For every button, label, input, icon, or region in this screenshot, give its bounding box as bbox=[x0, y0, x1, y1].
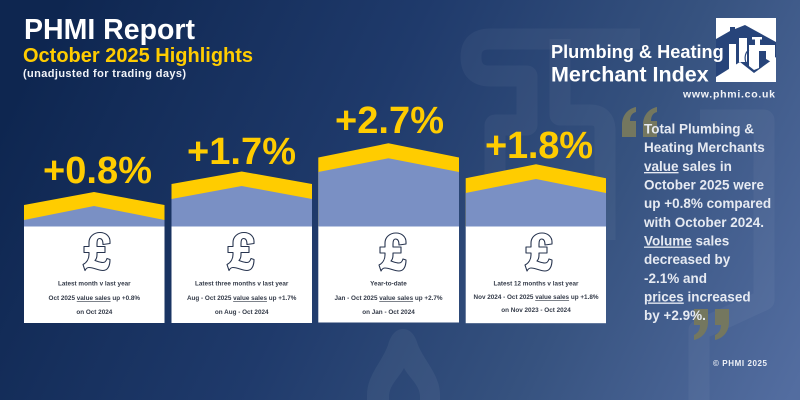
logo icon: house with tap bbox=[716, 18, 776, 82]
card text: Aug - Oct 2025 value sales up +1.7% bbox=[187, 295, 297, 302]
roof: yellow bbox=[172, 172, 312, 227]
roof: blue bbox=[318, 158, 459, 227]
roof: blue bbox=[24, 206, 164, 227]
percentage: +2.7% bbox=[335, 100, 444, 142]
card text: Jan - Oct 2025 value sales up +2.7% bbox=[334, 295, 443, 302]
summary text block: prices increased bbox=[644, 290, 751, 304]
card text bbox=[187, 281, 297, 316]
card body bbox=[24, 226, 164, 323]
panel: latest month bbox=[24, 150, 164, 323]
roof: blue bbox=[172, 186, 312, 227]
roof: blue bbox=[466, 179, 606, 227]
icon: closing quote marks bbox=[694, 309, 729, 340]
summary text block: with October 2024. bbox=[643, 215, 764, 230]
icon: pound bbox=[83, 232, 110, 270]
summary text block: Total Plumbing & bbox=[644, 122, 754, 136]
card text: Oct 2025 value sales up +0.8% bbox=[49, 295, 140, 302]
watermark flame bbox=[367, 329, 440, 400]
percentage: +1.8% bbox=[485, 125, 593, 167]
background watermark: pipes and flame bbox=[367, 39, 764, 400]
roof: yellow bbox=[24, 192, 164, 227]
summary text block: -2.1% and bbox=[644, 271, 707, 286]
summary text block: by +2.9%. bbox=[644, 308, 706, 323]
card body bbox=[318, 226, 459, 322]
card text: on Jan - Oct 2024 bbox=[362, 309, 415, 316]
card text bbox=[334, 281, 443, 316]
icon: pound bbox=[525, 233, 552, 271]
summary text block: up +0.8% compared bbox=[644, 196, 771, 211]
panel: latest 12 months bbox=[466, 125, 606, 323]
card text: Year-to-date bbox=[370, 281, 407, 288]
roof: yellow bbox=[466, 164, 606, 227]
summary text block: Volume sales bbox=[644, 234, 729, 248]
roof: yellow bbox=[318, 143, 459, 227]
card text: Latest 12 months v last year bbox=[494, 281, 579, 288]
card text bbox=[49, 281, 140, 316]
card body bbox=[466, 226, 606, 323]
summary text block: value sales in bbox=[644, 159, 732, 174]
logo wordmark: Plumbing & Heating bbox=[551, 42, 724, 62]
card text: Latest month v last year bbox=[58, 281, 131, 288]
card text: Latest three months v last year bbox=[195, 281, 289, 288]
percentage: +1.7% bbox=[187, 131, 296, 173]
panel: year-to-date bbox=[318, 100, 459, 322]
summary text block: Heating Merchants bbox=[644, 140, 765, 155]
icon: opening quote marks bbox=[622, 107, 657, 137]
card text: Nov 2024 - Oct 2025 value sales up +1.8% bbox=[473, 294, 599, 301]
card text bbox=[473, 281, 599, 314]
note: (unadjusted for trading days) bbox=[23, 68, 186, 80]
panel: latest three months bbox=[172, 131, 312, 323]
logo: Plumbing & Heating Merchant Index bbox=[551, 18, 776, 100]
watermark pipes bbox=[471, 39, 764, 400]
card text: on Aug - Oct 2024 bbox=[215, 309, 269, 316]
website: www.phmi.co.uk bbox=[682, 88, 775, 100]
summary text block: October 2025 were bbox=[644, 178, 765, 192]
logo: Plumbing & Heating Merchant Index: Merchant Index bbox=[551, 62, 709, 86]
icon: pound bbox=[227, 232, 254, 270]
copyright: © PHMI 2025 bbox=[713, 359, 768, 368]
card text: on Oct 2024 bbox=[76, 309, 113, 316]
summary text block: decreased by bbox=[644, 252, 731, 267]
subheading: October 2025 Highlights bbox=[23, 45, 253, 67]
card text: on Nov 2023 - Oct 2024 bbox=[501, 307, 571, 314]
main heading: PHMI Report bbox=[24, 14, 196, 46]
title bbox=[23, 14, 253, 80]
percentage: +0.8% bbox=[43, 150, 152, 192]
card body bbox=[172, 226, 312, 323]
icon: pound bbox=[379, 233, 406, 271]
